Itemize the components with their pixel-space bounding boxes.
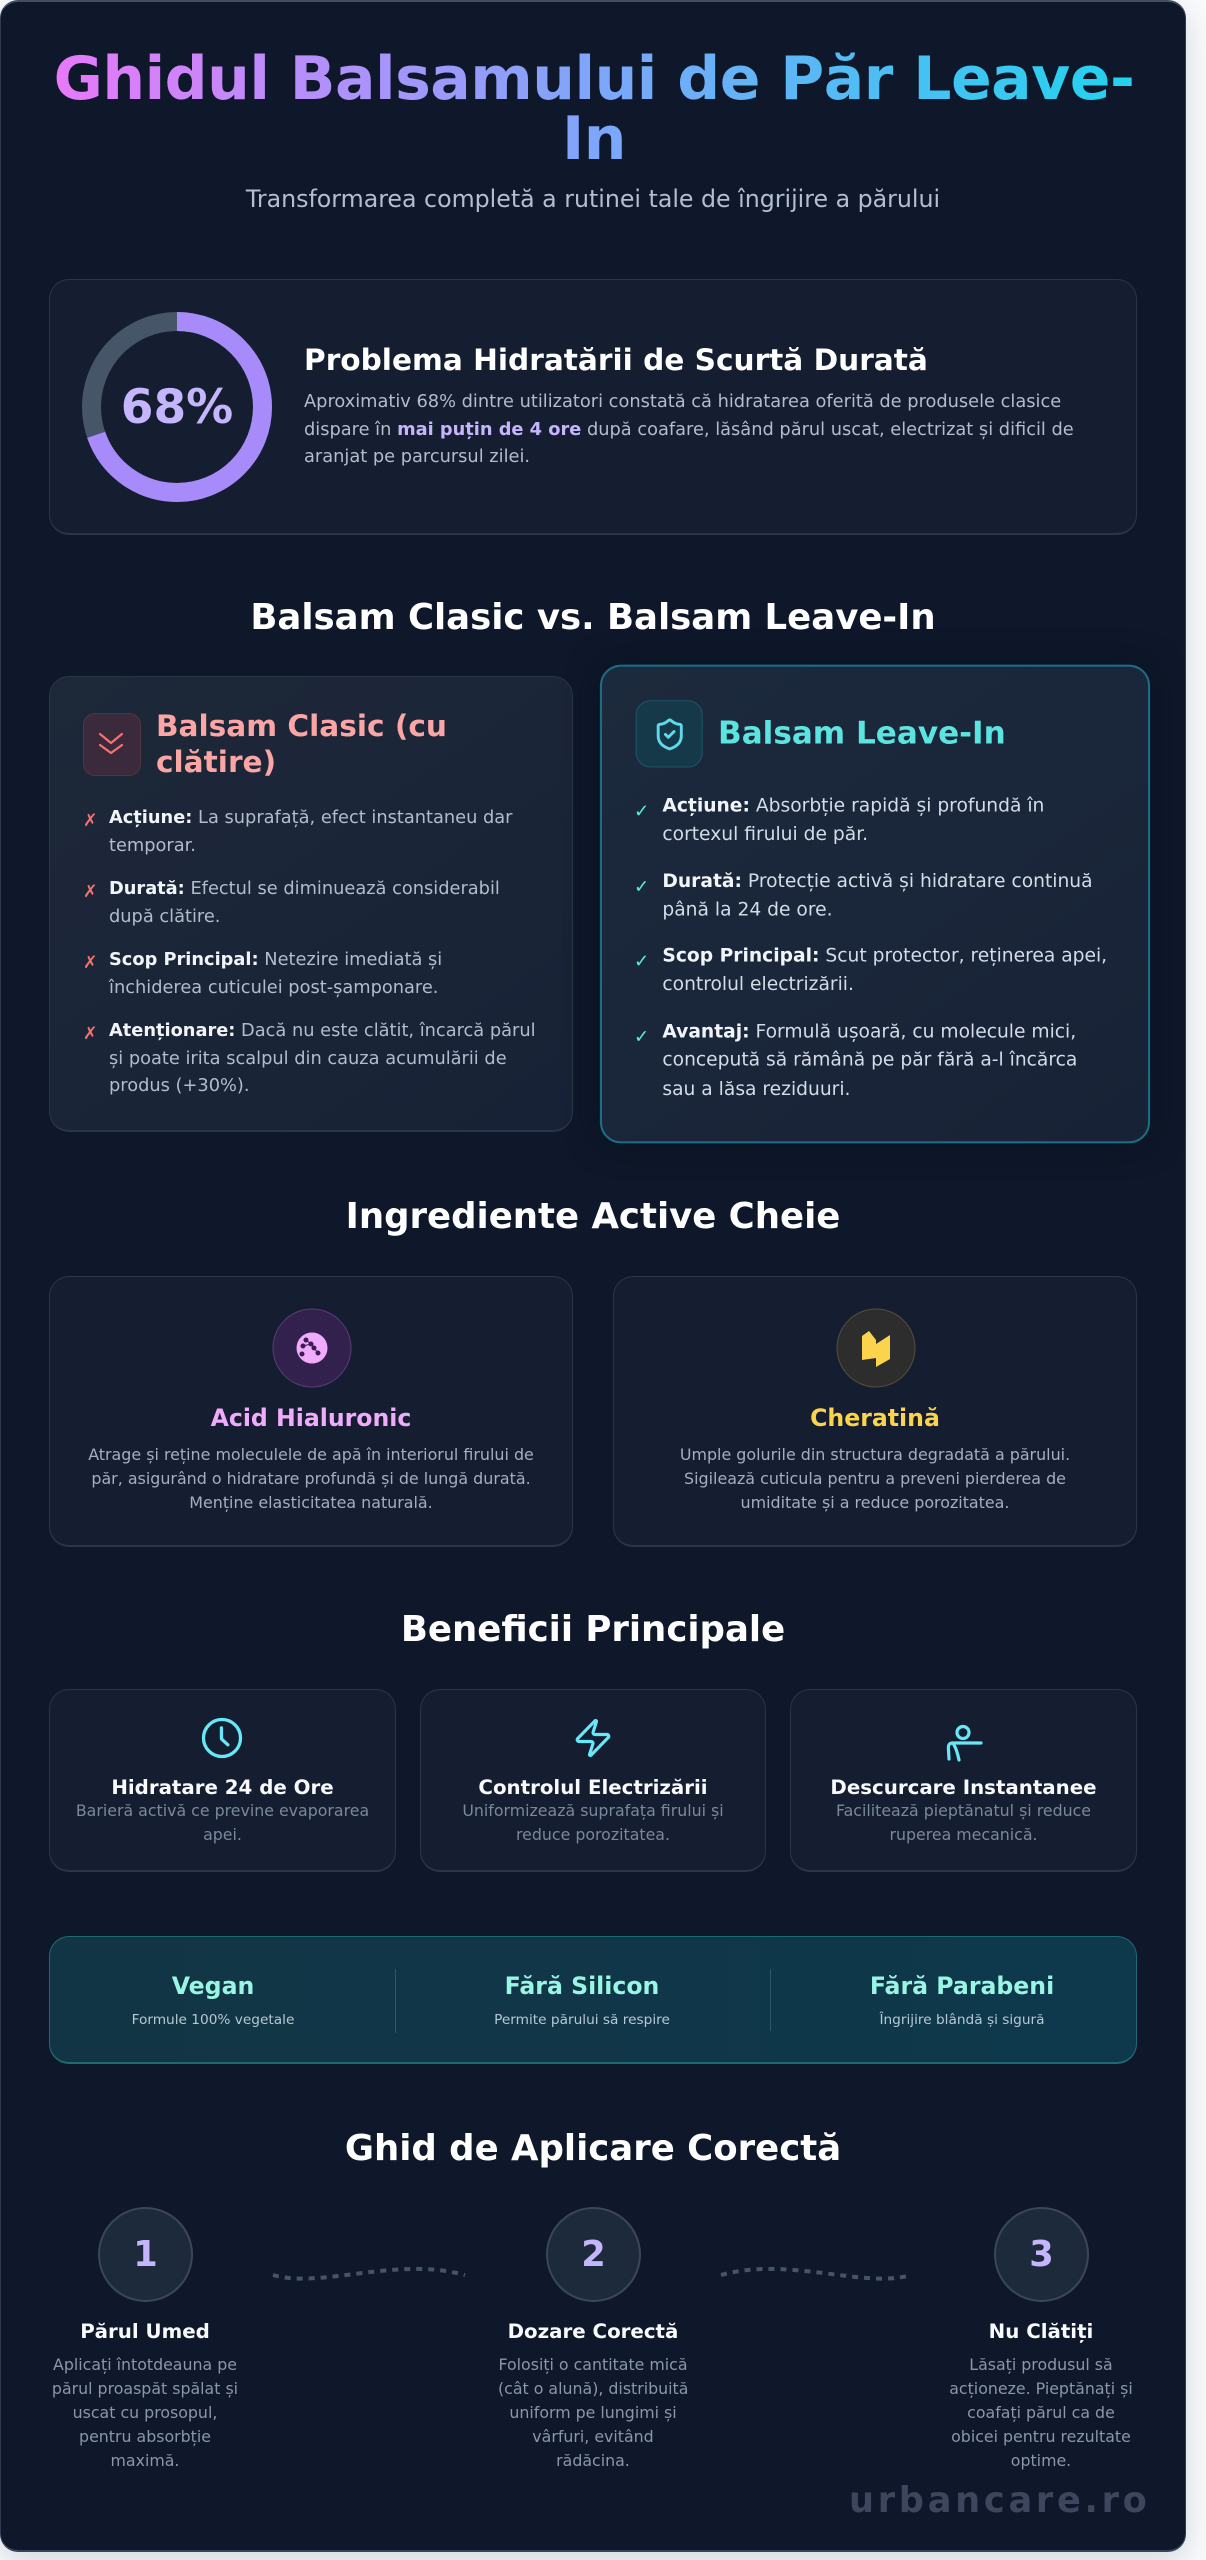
problem text: dispare în mai puțin de 4 ore după coafare, lăsând părul uscat, electrizat și dificil de [304,419,1074,440]
claim: paraben free [870,1972,1054,2028]
step 1 [52,2207,238,2470]
heading: main benefits: Beneficii Principale [401,1609,785,1650]
benefit text: Barieră activă ce previne evaporarea [76,1801,369,1820]
heading: application guide: Ghid de Aplicare Corectă [345,2128,841,2169]
step number: 1 [133,2234,158,2275]
title: In [562,104,626,174]
claim: silicone free [494,1972,670,2028]
title: Ghidul Balsamului de Păr Leave- [54,44,1134,114]
item: main purpose [634,944,1107,995]
panel: instant detangling [790,1689,1137,1872]
item: duration: după clătire. [109,906,220,927]
step number: 2 [581,2234,606,2275]
panel: claims banner [49,1936,1137,2064]
claim: silicone free: Permite părului să respire [494,2012,670,2028]
claim: silicone free: Fără Silicon [505,1972,659,2000]
step text: vârfuri, evitând [532,2427,654,2446]
benefit text: apei. [203,1825,242,1844]
panel: classic conditioner: ✗ [83,882,97,902]
problem heading: Problema Hidratării de Scurtă Durată [304,343,928,377]
keratin description: umiditate și a reduce porozitatea. [741,1493,1009,1512]
step text: Folosiți o cantitate mică [498,2355,688,2374]
step text [498,2355,688,2470]
item: advantage [634,1020,1077,1100]
benefit text: Facilitează pieptănatul și reduce [836,1801,1091,1820]
panel: leave-in conditioner: ✓ [634,801,649,822]
item: action [83,807,512,856]
benefit text [76,1801,369,1844]
item: main purpose: controlul electrizării. [662,973,854,995]
acid description [88,1445,534,1512]
item: duration: până la 24 de ore. [662,899,833,921]
step text: acționeze. Pieptănați și [949,2379,1133,2398]
item: duration [83,878,500,927]
benefit heading: Descurcare Instantanee [830,1776,1097,1799]
step text: pentru absorbție [79,2427,211,2446]
icon: molecule [272,1308,352,1388]
step text: optime. [1011,2451,1071,2470]
icon: chevrons down [83,713,141,776]
item: action: Acțiune: Absorbție rapidă și profundă în [662,794,1044,816]
step 3 [949,2207,1133,2470]
step 2 [498,2207,688,2470]
panel: leave-in conditioner [600,665,1150,1143]
icon: clock [202,1718,242,1758]
item: warning: produs (+30%). [109,1075,250,1096]
item: action [634,794,1044,845]
heading: comparison: Balsam Clasic vs. Balsam Leave-In [250,597,936,638]
claim: vegan [132,1972,294,2028]
benefit text: ruperea mecanică. [889,1825,1038,1844]
keratin description: Umple golurile din structura degradată a părului. [680,1445,1070,1464]
panel: leave-in conditioner: ✓ [634,1026,649,1047]
step text: obicei pentru rezultate [951,2427,1131,2446]
claim: paraben free: Fără Parabeni [870,1972,1054,2000]
step text: uscat cu prosopul, [73,2403,217,2422]
panel: leave-in conditioner: ✓ [634,876,649,897]
classic heading: clătire) [156,745,276,779]
item: warning: și poate irita scalpul din cauza acumulării de [109,1048,507,1069]
item: action: Acțiune: La suprafață, efect instantaneu dar [109,807,512,828]
step text: coafați părul ca de [967,2403,1115,2422]
step text: rădăcina. [556,2451,630,2470]
subtitle: Transformarea completă a rutinei tale de îngrijire a părului [246,185,940,213]
step text [949,2355,1133,2470]
keratin heading: Cheratină [810,1404,940,1432]
panel: classic conditioner: ✗ [83,953,97,973]
step text: Lăsați produsul să [969,2355,1113,2374]
benefit heading: Hidratare 24 de Ore [111,1776,334,1799]
step heading: Dozare Corectă [508,2320,678,2343]
step number: 3 [1029,2234,1054,2275]
keratin description: Sigilează cuticula pentru a preveni pierderea de [684,1469,1066,1488]
panel: classic conditioner: ✗ [83,811,97,831]
icon: keratin [836,1308,916,1388]
benefit text [462,1801,724,1844]
watermark: urbancare.ro [849,2480,1151,2521]
step number [546,2207,641,2302]
donut chart: 68%: 68% [121,380,233,435]
problem text: Aproximativ 68% dintre utilizatori constată că hidratarea oferită de produsele clasice [304,391,1061,412]
benefit text [836,1801,1091,1844]
item: main purpose: Scop Principal: Scut protector, reținerea apei, [662,944,1107,966]
acid heading: Acid Hialuronic [211,1404,411,1432]
item: main purpose: închiderea cuticulei post-șamponare. [109,977,438,998]
item: duration: Durată: Efectul se diminuează considerabil [109,878,500,899]
panel: frizz control [420,1689,766,1872]
item: advantage: sau a lăsa reziduuri. [662,1078,850,1100]
icon: lightning bolt [576,1718,610,1758]
item: main purpose [83,949,442,998]
leave-in list [634,794,1107,1100]
item: duration [634,870,1093,921]
claim: vegan: Formule 100% vegetale [132,2012,294,2028]
step text: părul proaspăt spălat și [52,2379,238,2398]
acid description: Menține elasticitatea naturală. [189,1493,433,1512]
panel: classic conditioner [49,676,573,1132]
item: duration: Durată: Protecție activă și hidratare continuă [662,870,1093,892]
item: action: cortexul firului de păr. [662,823,868,845]
panel: classic conditioner: ✗ [83,1024,97,1044]
item: advantage: concepută să rămână pe păr fără a-l încărca [662,1049,1077,1071]
step number [98,2207,193,2302]
item: action: temporar. [109,835,196,856]
classic heading: Balsam Clasic (cu [156,709,447,743]
claim: paraben free: Îngrijire blândă și sigură [879,2012,1045,2028]
icon: person [946,1724,983,1762]
donut chart: 68% [82,312,272,502]
step text: maximă. [111,2451,179,2470]
item: warning: Atenționare: Dacă nu este clătit, încarcă părul [109,1020,536,1041]
leave-in heading: Balsam Leave-In [718,715,1006,751]
icon: shield check [636,700,703,768]
item: advantage: Avantaj: Formulă ușoară, cu molecule mici, [662,1020,1076,1042]
item: main purpose: Scop Principal: Netezire imediată și [109,949,442,970]
step text [52,2355,238,2470]
step text: (cât o alună), distribuită [498,2379,688,2398]
benefit text: Uniformizează suprafața firului și [462,1801,724,1820]
panel: problem [49,279,1137,535]
panel: leave-in conditioner: ✓ [634,951,649,972]
classic list [83,807,536,1096]
benefit heading: Controlul Electrizării [478,1776,708,1799]
panel: 24 hour hydration [49,1689,396,1872]
step text: Aplicați întotdeauna pe [53,2355,237,2374]
arrow: connector 1 to 2 [272,2266,466,2281]
keratin description [680,1445,1070,1512]
arrow: connector 2 to 3 [720,2266,906,2281]
panel: keratin [613,1276,1137,1547]
panel: hyaluronic acid [49,1276,573,1547]
acid description: păr, asigurând o hidratare profundă și de lungă durată. [91,1469,531,1488]
step heading: Nu Clătiți [989,2320,1093,2343]
acid description: Atrage și reține moleculele de apă în interiorul firului de [88,1445,534,1464]
heading: active ingredients: Ingrediente Active Cheie [346,1196,840,1237]
title [51,49,1137,169]
problem text: aranjat pe parcursul zilei. [304,446,530,467]
classic heading [156,709,447,779]
claim: vegan: Vegan [172,1972,254,2000]
problem text [304,391,1074,467]
step number [994,2207,1089,2302]
step text: uniform pe lungimi și [509,2403,677,2422]
item: warning [83,1020,536,1096]
step heading: Părul Umed [80,2320,210,2343]
benefit text: reduce porozitatea. [516,1825,670,1844]
